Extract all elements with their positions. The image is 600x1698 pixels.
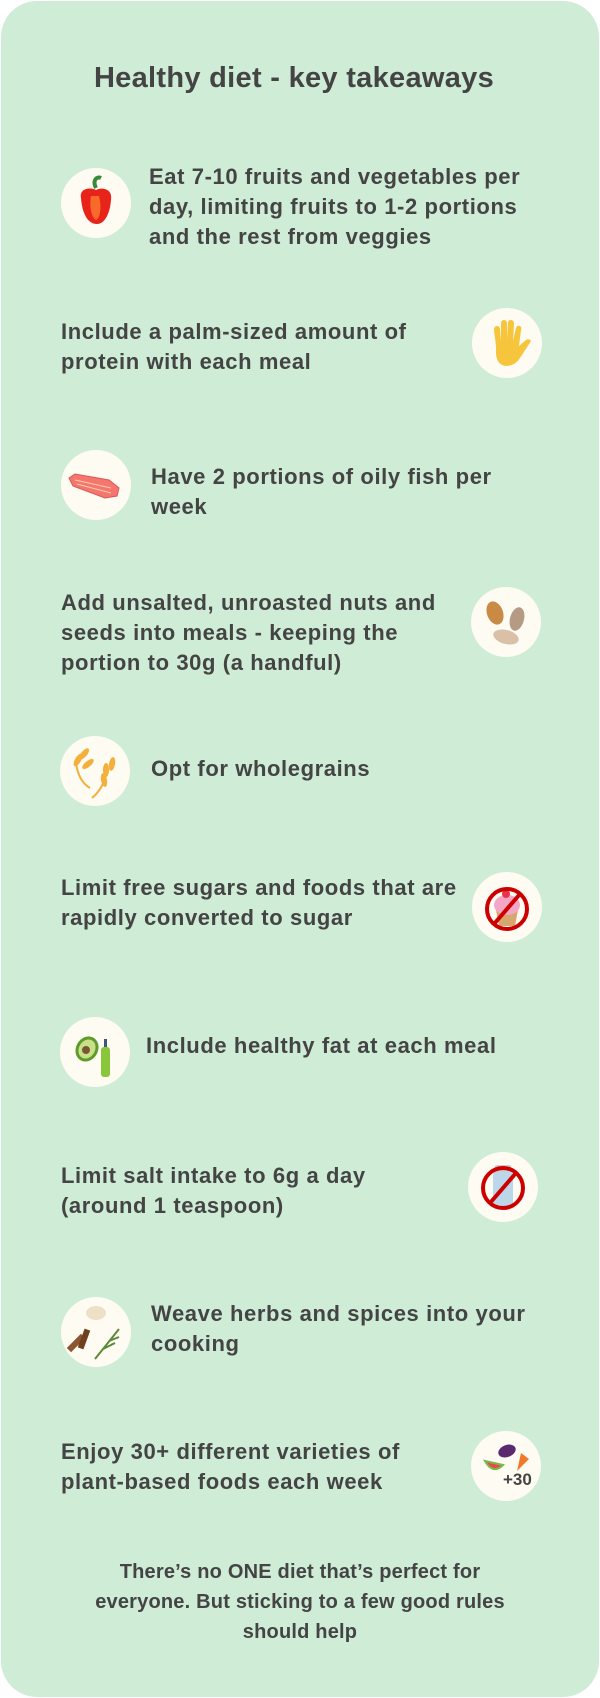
footer text: should help (243, 1621, 357, 1643)
text: nuts: Add unsalted, unroasted nuts and (61, 590, 436, 615)
text: oily fish (151, 464, 492, 519)
icon: avocado and oil (60, 1017, 130, 1087)
text: oily fish: week (151, 494, 207, 519)
text: herbs: cooking (151, 1331, 240, 1356)
text: salt: (around 1 teaspoon) (61, 1193, 284, 1218)
text: protein: protein with each meal (61, 349, 311, 374)
text: fruits and vegetables: Eat 7-10 fruits and vegetables per (149, 164, 520, 189)
text: sugars: rapidly converted to sugar (61, 905, 353, 930)
text: oily fish: Have 2 portions of oily fish per (151, 464, 492, 489)
text: nuts (61, 590, 436, 675)
text: fruits and vegetables: and the rest from veggies (149, 224, 432, 249)
text: protein (61, 319, 407, 374)
text: sugars (61, 875, 457, 930)
icon: no salt (468, 1152, 538, 1222)
text: salt (61, 1163, 366, 1218)
footer text: everyone. But sticking to a few good rules (95, 1591, 505, 1613)
title: Healthy diet - key takeaways (94, 62, 494, 94)
icon: plants +30: +30 (503, 1470, 532, 1489)
icon: no cupcake (472, 872, 542, 942)
text: plant varieties (61, 1439, 400, 1494)
text: nuts: seeds into meals - keeping the (61, 620, 398, 645)
text: salt: Limit salt intake to 6g a day (61, 1163, 366, 1188)
text: fruits and vegetables (149, 164, 520, 249)
text: healthy fat: Include healthy fat at each meal (146, 1033, 497, 1058)
icon: wholegrains (60, 736, 130, 806)
icon: plants +30 (471, 1431, 541, 1501)
icon: herbs and spices (61, 1297, 131, 1367)
icon: hand (472, 308, 542, 378)
icon: nuts (471, 587, 541, 657)
footer text (95, 1561, 505, 1643)
text: sugars: Limit free sugars and foods that are (61, 875, 457, 900)
text: plant varieties: Enjoy 30+ different varieties of (61, 1439, 400, 1464)
text: protein: Include a palm-sized amount of (61, 319, 407, 344)
text: plant varieties: plant-based foods each week (61, 1469, 383, 1494)
text: herbs (151, 1301, 526, 1356)
text: herbs: Weave herbs and spices into your (151, 1301, 526, 1326)
text: wholegrains: Opt for wholegrains (151, 756, 370, 781)
icon: pepper (61, 168, 131, 238)
footer text: There’s no ONE diet that’s perfect for (120, 1561, 480, 1583)
icon: fish fillet (61, 450, 131, 520)
text: fruits and vegetables: day, limiting fruits to 1-2 portions (149, 194, 517, 219)
text: nuts: portion to 30g (a handful) (61, 650, 342, 675)
